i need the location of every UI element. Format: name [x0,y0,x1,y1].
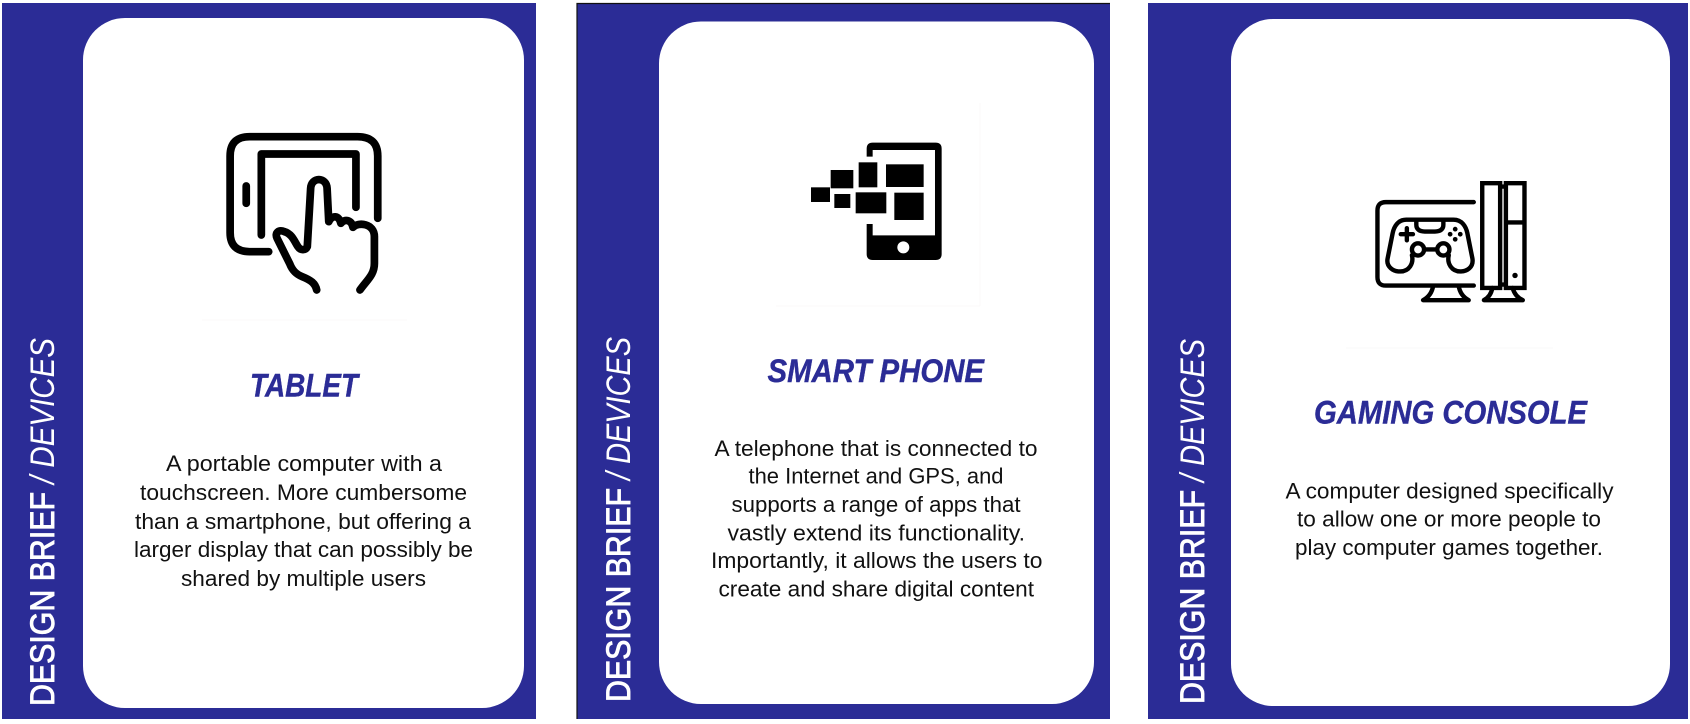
title: gaming console: GAMING CONSOLE [1314,394,1589,430]
description: tablet: than a smartphone, but offering a [135,509,472,534]
description: smart phone: supports a range of apps that [732,492,1020,517]
side label: gaming console: DESIGN BRIEF [1174,490,1212,704]
description: tablet: touchscreen. More cumbersome [140,480,467,505]
side label: gaming console [1174,339,1212,704]
side label: tablet: DESIGN BRIEF [24,492,62,706]
description: tablet: A portable computer with a [166,451,443,476]
game controller [1387,220,1473,271]
console tower [1482,183,1524,300]
description: gaming console [1286,478,1614,560]
description: tablet: larger display that can possibly be [134,537,473,562]
panel: tablet [2,3,536,719]
side label: tablet [24,338,62,706]
description: gaming console: to allow one or more people to [1297,506,1601,532]
description: tablet: shared by multiple users [181,566,426,591]
description: smart phone: the Internet and GPS, and [748,464,1004,488]
side label: tablet: / DEVICES [24,338,62,486]
description: smart phone: A telephone that is connected to [714,436,1038,461]
title: tablet: TABLET [250,368,360,404]
side label: smart phone: DESIGN BRIEF [600,488,638,702]
icon: tablet with touching hand [230,137,378,290]
title: smart phone: SMART PHONE [768,353,986,389]
panel: gaming console [1148,3,1688,719]
description: tablet [134,451,473,591]
panel: smart phone [577,3,1110,719]
icon: monitor with game controller and console tower [1377,183,1524,300]
icon: phone with pixel squares [811,143,942,260]
monitor [1377,202,1474,300]
description: smart phone [711,436,1042,602]
description: smart phone: vastly extend its functionality. [728,520,1025,546]
description: smart phone: create and share digital content [718,576,1034,602]
side label: smart phone: / DEVICES [600,337,638,482]
side label: smart phone [600,337,638,702]
side label: gaming console: / DEVICES [1174,339,1212,484]
description: gaming console: A computer designed specifically [1286,478,1614,504]
description: smart phone: Importantly, it allows the users to [711,548,1042,573]
description: gaming console: play computer games together. [1295,535,1603,560]
